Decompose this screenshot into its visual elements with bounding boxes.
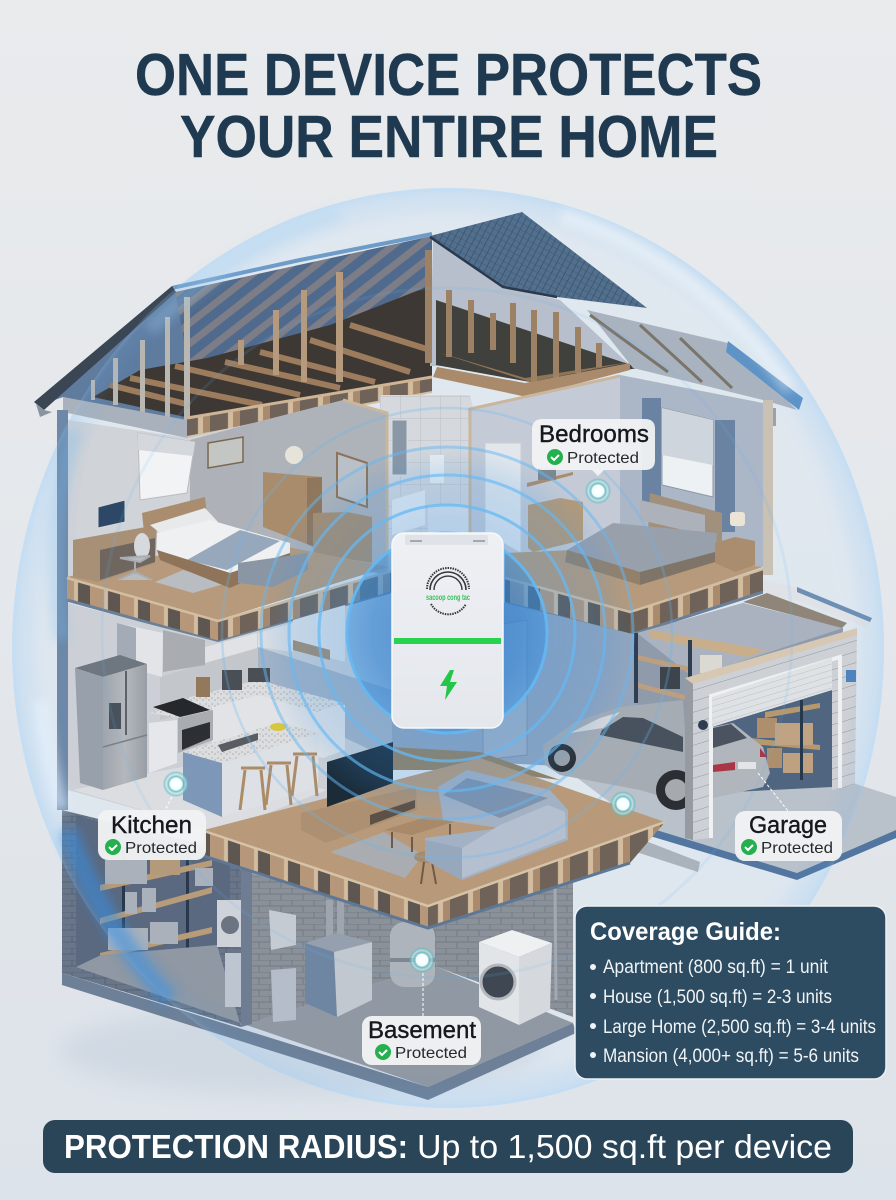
attic dark floor area <box>93 285 432 418</box>
signal waves <box>102 288 792 978</box>
location dot <box>585 478 611 504</box>
bubble <box>735 811 842 861</box>
lamp <box>730 512 745 526</box>
bubble <box>532 419 655 476</box>
centre bathroom tile wall <box>380 395 510 640</box>
side table <box>414 851 442 884</box>
rug <box>155 570 227 593</box>
device top recess <box>405 535 488 545</box>
device body <box>392 533 503 728</box>
mirror <box>337 453 367 507</box>
bathroom mirror <box>392 420 407 475</box>
right attic posts <box>425 250 602 383</box>
slab edge <box>640 825 896 880</box>
towel rail <box>430 455 444 483</box>
label: bedrooms <box>532 419 655 504</box>
logo <box>426 568 470 614</box>
right wall <box>253 400 387 575</box>
dresser <box>528 498 583 552</box>
right upper bedroom <box>468 375 776 635</box>
small appliance <box>225 953 241 1007</box>
coverage list: House (1,500 sq.ft) = 2-3 units <box>603 987 832 1008</box>
leader <box>422 973 424 1016</box>
ottomans <box>238 553 308 587</box>
sphere streaks <box>40 215 790 1000</box>
leader <box>758 773 788 811</box>
lower roof <box>763 580 872 628</box>
tub <box>428 505 470 535</box>
green light bar <box>394 638 501 644</box>
coverage list <box>590 957 876 1067</box>
water heater <box>271 968 296 1022</box>
door frame <box>693 633 857 840</box>
small appliances <box>196 668 270 697</box>
tv <box>327 742 393 807</box>
oven <box>178 710 213 753</box>
shelves with boxes <box>750 700 820 780</box>
lightning bolt <box>440 670 457 700</box>
rear brick wall mid <box>251 873 437 1023</box>
attic and roof <box>34 212 803 438</box>
upper cabinets <box>117 605 345 677</box>
kitchen <box>68 593 392 832</box>
label heading: Garage <box>749 812 827 839</box>
left upper bedroom <box>67 400 392 642</box>
curtain right <box>715 420 735 532</box>
gable underside left <box>38 290 187 425</box>
coverage list: Mansion (4,000+ sq.ft) = 5-6 units <box>603 1046 859 1067</box>
pipes <box>326 900 333 942</box>
joists right <box>428 822 665 928</box>
trim <box>711 657 840 838</box>
banner bold text: PROTECTION RADIUS: <box>64 1128 408 1165</box>
coffee table <box>384 817 460 852</box>
wall <box>68 593 392 832</box>
label heading: Basement <box>368 1017 476 1044</box>
outlet slots <box>410 540 485 542</box>
tv console <box>301 787 417 843</box>
wave rings <box>102 288 792 978</box>
floor <box>505 548 763 612</box>
dresser <box>263 472 322 550</box>
status: Protected <box>567 450 639 467</box>
wave halo <box>259 445 635 821</box>
stove <box>153 698 210 717</box>
check icon <box>547 449 563 465</box>
frame top <box>685 628 857 684</box>
protection radius banner <box>43 1120 853 1173</box>
monitor <box>98 500 125 528</box>
window <box>138 433 195 500</box>
wall left section <box>468 375 620 553</box>
ceiling <box>637 603 843 677</box>
hall and door below device <box>355 590 637 780</box>
title <box>135 42 762 170</box>
pipe two <box>337 900 344 938</box>
ornaments <box>538 468 556 480</box>
lower cabinets <box>212 695 345 758</box>
coverage list: Apartment (800 sq.ft) = 1 unit <box>603 957 829 978</box>
status: Protected <box>761 840 833 857</box>
check icon <box>375 1044 391 1060</box>
shelves left <box>634 630 767 703</box>
outer slab <box>62 973 576 1100</box>
brick edge <box>763 400 773 575</box>
wall sensor <box>698 720 708 730</box>
ground shadow <box>60 1005 540 1095</box>
floor joists <box>505 578 630 635</box>
rear brick wall right <box>430 877 573 1017</box>
window <box>662 408 713 497</box>
shingle roof plane <box>430 212 647 308</box>
opening behind door <box>712 690 832 793</box>
car <box>543 700 770 810</box>
rug <box>330 832 423 878</box>
wood floor strip <box>355 745 560 780</box>
panel heading: Coverage Guide: <box>590 918 781 946</box>
rear posts <box>238 272 343 382</box>
curtain left <box>642 398 661 516</box>
shelf <box>527 472 573 487</box>
fridge <box>75 655 147 790</box>
sink unit <box>392 490 425 535</box>
left room shelves <box>100 850 213 968</box>
left gable posts <box>91 297 190 422</box>
location dot <box>409 947 435 973</box>
left eave soffit board <box>63 397 187 438</box>
check icon <box>105 839 121 855</box>
attic joists <box>110 325 430 405</box>
furnace <box>305 933 372 1017</box>
status: Protected <box>125 840 197 857</box>
washer <box>479 930 552 1025</box>
desk <box>73 525 157 582</box>
floor <box>73 760 327 832</box>
label: garage <box>610 773 842 861</box>
downpipe <box>773 408 776 426</box>
concrete step <box>630 835 700 872</box>
banner regular text: Up to 1,500 sq.ft per device <box>417 1128 832 1165</box>
left outer wall <box>57 410 68 810</box>
logo: sacoop cong tac <box>426 593 470 602</box>
panel <box>269 910 296 950</box>
left wall <box>68 420 253 590</box>
front attic joist <box>187 376 432 438</box>
granite counter <box>150 680 343 718</box>
check icon <box>741 839 757 855</box>
right eave roof <box>587 310 797 410</box>
tank <box>390 922 435 987</box>
interior walls <box>637 603 843 790</box>
location dot <box>610 791 636 817</box>
bed <box>142 497 290 588</box>
floor <box>67 540 388 620</box>
garage <box>543 580 896 880</box>
frame side <box>685 678 693 840</box>
joists left <box>204 830 428 928</box>
device <box>392 533 503 728</box>
bubble <box>98 810 206 860</box>
drawers <box>149 720 177 773</box>
chair <box>118 533 152 580</box>
dividing column <box>241 868 252 1027</box>
house cutaway illustration <box>34 212 896 1100</box>
island <box>183 722 319 817</box>
left eave <box>34 286 176 410</box>
side light <box>846 670 856 682</box>
door <box>485 443 521 553</box>
sofa <box>425 770 568 880</box>
floor joists <box>67 577 218 642</box>
label: basement <box>362 947 481 1065</box>
roof ridge left edge <box>172 234 432 288</box>
location dot <box>163 771 189 797</box>
roof underside stripes <box>175 236 432 372</box>
small washer <box>217 900 241 947</box>
range hood <box>163 630 205 672</box>
left room darkness <box>76 815 230 967</box>
leader <box>165 797 172 810</box>
title: ONE DEVICE PROTECTS <box>135 42 762 108</box>
bed <box>565 493 722 585</box>
slab <box>560 765 896 873</box>
sphere edge overlay <box>12 188 884 1108</box>
bubble <box>362 1016 481 1065</box>
coverage guide panel <box>575 906 886 1079</box>
wave inner disc <box>347 533 547 733</box>
status: Protected <box>395 1045 467 1062</box>
door slats <box>712 658 832 727</box>
picture <box>208 437 243 468</box>
right attic ceiling <box>430 240 633 368</box>
basement <box>62 810 576 1100</box>
label heading: Kitchen <box>111 812 192 839</box>
stools <box>240 754 317 810</box>
door <box>483 620 527 760</box>
nightstand <box>715 537 755 572</box>
nightstand <box>313 512 372 563</box>
wall right section <box>620 375 763 567</box>
right attic floor edge <box>433 363 630 397</box>
living room <box>204 742 665 928</box>
outer left wall <box>62 810 241 1027</box>
wall pipe <box>500 885 556 1000</box>
flowers <box>285 446 303 464</box>
protective sphere back <box>12 188 884 1108</box>
label: kitchen <box>98 771 206 860</box>
label heading: Bedrooms <box>539 421 649 448</box>
title: YOUR ENTIRE HOME <box>180 104 718 170</box>
floor <box>204 758 665 906</box>
floor <box>76 945 573 1087</box>
